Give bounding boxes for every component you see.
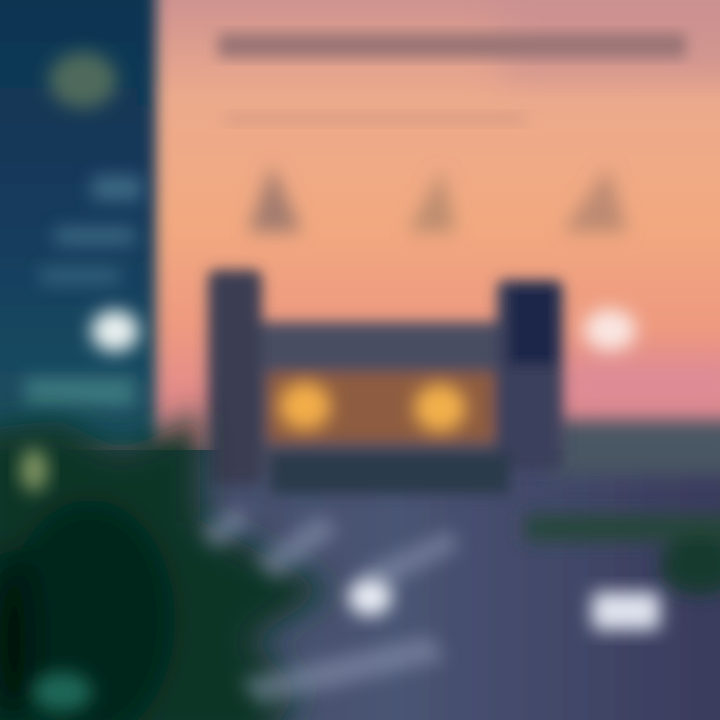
distant tree line xyxy=(525,420,720,595)
left glowing window xyxy=(279,382,331,430)
road reflections xyxy=(200,505,460,705)
road highlight right xyxy=(592,592,660,630)
icon: right xyxy=(562,168,628,232)
left tower panel xyxy=(0,0,156,450)
building base xyxy=(270,452,510,494)
plant yellow accent xyxy=(20,448,48,492)
icon row xyxy=(248,165,628,232)
ground and road xyxy=(0,455,720,720)
tower panel text lines xyxy=(25,176,142,406)
sky tint upper right xyxy=(500,0,720,80)
plant foliage xyxy=(0,410,330,720)
icon: left xyxy=(248,165,302,232)
subtitle line xyxy=(225,113,525,125)
right building tower xyxy=(497,280,563,470)
plant teal accent xyxy=(32,672,92,712)
building body xyxy=(250,322,510,472)
white highlight right xyxy=(584,309,636,351)
tower panel emblem xyxy=(49,52,117,108)
central building xyxy=(208,270,563,494)
left building tower xyxy=(208,270,262,485)
horizon glow xyxy=(560,360,720,406)
right tower inner dark xyxy=(508,285,558,365)
road highlight center xyxy=(348,578,392,616)
sky background xyxy=(0,0,720,450)
title bar xyxy=(218,33,686,58)
tower panel highlight xyxy=(91,310,139,352)
right glowing window xyxy=(414,384,466,432)
icon: middle xyxy=(408,170,456,232)
window band xyxy=(268,372,494,442)
